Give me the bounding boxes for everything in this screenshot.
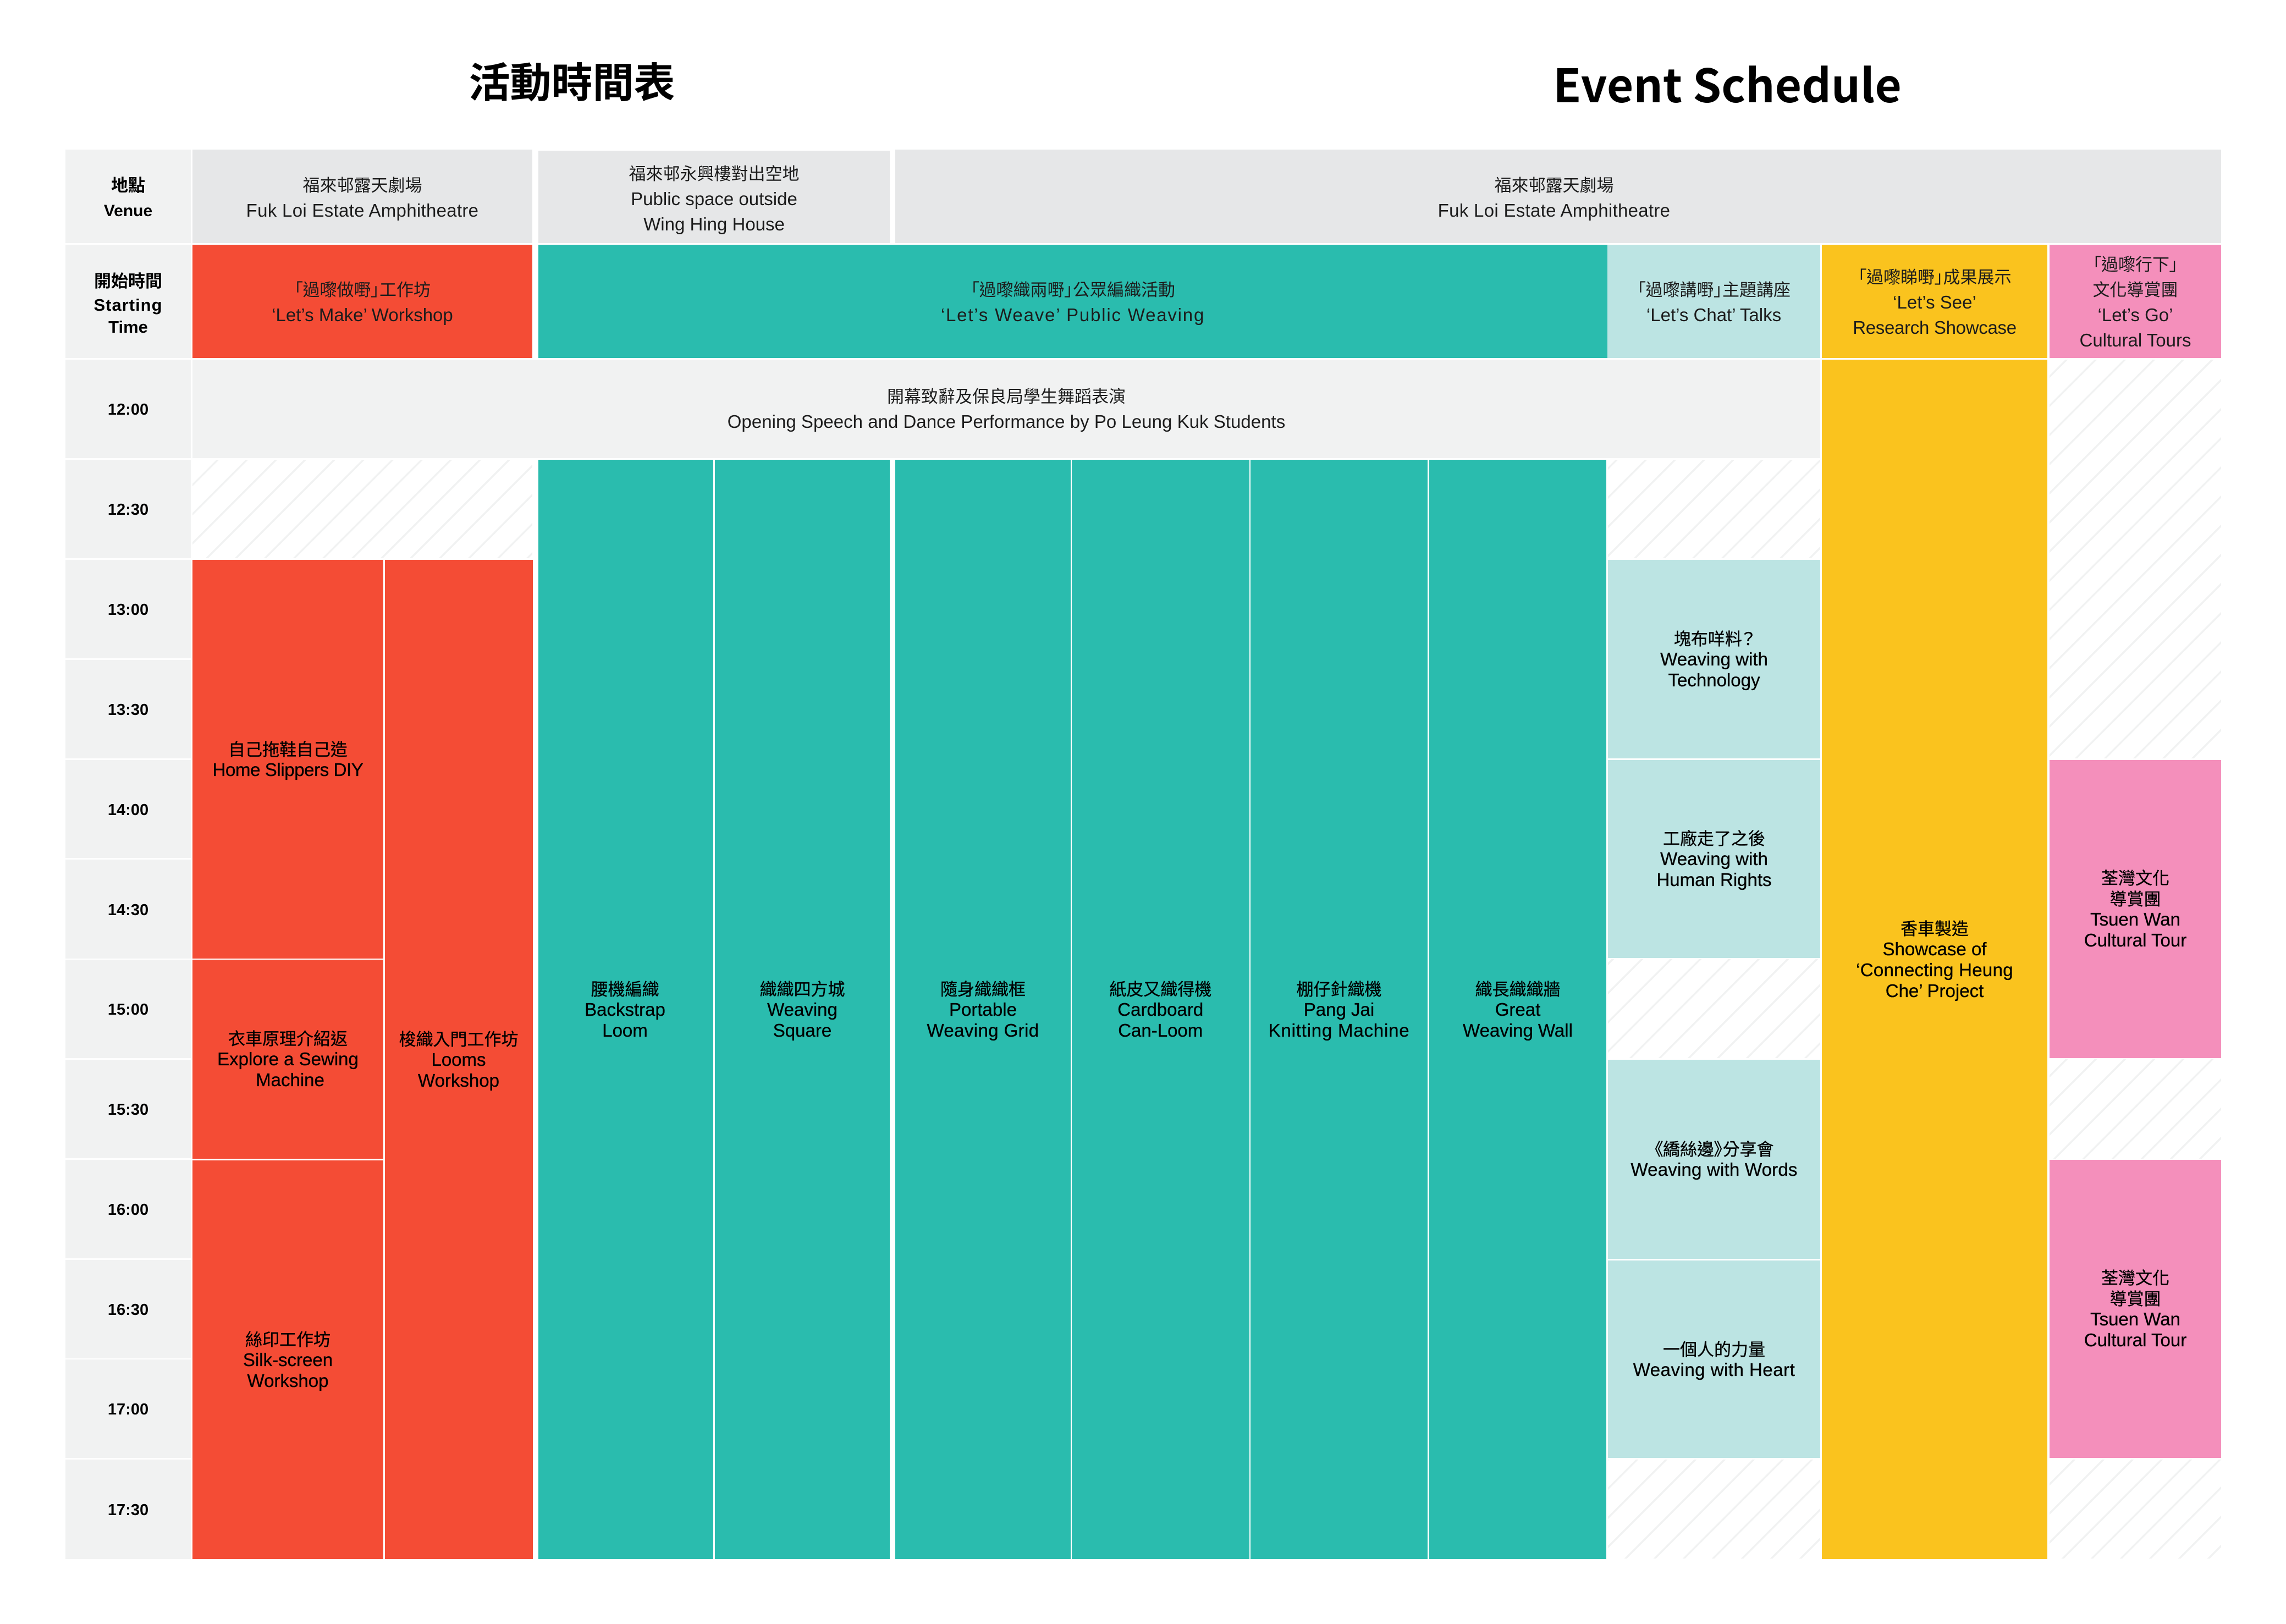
talk: Weaving with Words: Weaving with Words	[1631, 1159, 1798, 1180]
workshop: Home Slippers DIY	[192, 560, 383, 959]
category header: Let's See: 「過嚟睇嘢」成果展示	[1858, 268, 2012, 287]
time label 15:30	[65, 1060, 191, 1158]
venue: Wing Hing House	[538, 151, 890, 243]
hatched empty slot: tours 12:00 to 13:30	[2050, 360, 2221, 758]
category header: Let's Weave: ‘Let’s Weave’ Public Weaving	[941, 305, 1205, 325]
weaving: Cardboard Can-Loom: 紙皮又織得機	[1109, 980, 1211, 999]
time label 16:00: 16:00	[108, 1201, 148, 1219]
weaving: Portable Weaving Grid: 隨身織織框	[940, 980, 1026, 999]
category header: Let's Weave	[538, 245, 1607, 358]
time label 16:30: 16:30	[108, 1301, 148, 1319]
time label 12:00	[65, 360, 191, 458]
weaving: Backstrap Loom: Loom	[602, 1020, 648, 1041]
weaving: Great Weaving Wall: Weaving Wall	[1463, 1020, 1573, 1041]
time label 13:30	[65, 660, 191, 758]
weaving: Weaving Square: 織織四方城	[760, 980, 845, 999]
workshop: Explore a Sewing Machine: 衣車原理介紹返	[228, 1030, 348, 1049]
time label 14:00: 14:00	[108, 801, 148, 818]
tour: Tsuen Wan Cultural Tour, second session: Cultural Tour	[2084, 1330, 2186, 1350]
workshop: Silk-screen: 絲印工作坊	[245, 1330, 330, 1350]
venue: Fuk Loi Estate Amphitheatre, workshops: 福來邨露天劇場	[302, 176, 422, 195]
talk: Weaving with Technology: Weaving with	[1660, 649, 1768, 669]
category header: Let's See: ‘Let’s See’	[1893, 292, 1976, 312]
time label 15:00: 15:00	[108, 1001, 148, 1019]
tour: Tsuen Wan Cultural Tour, first session: 荃灣文化	[2101, 869, 2169, 888]
tour: Tsuen Wan Cultural Tour, first session	[2050, 760, 2221, 1058]
time label 15:00	[65, 960, 191, 1058]
showcase: Connecting Heung Che: ‘Connecting Heung	[1856, 959, 2013, 980]
weaving: Pang Jai Knitting Machine: Pang Jai	[1304, 999, 1374, 1020]
time label 16:30	[65, 1260, 191, 1358]
talk: Weaving with Heart: Weaving with Heart	[1633, 1359, 1795, 1379]
tour: Tsuen Wan Cultural Tour, second session: 導賞團	[2109, 1290, 2161, 1309]
time label 13:30: 13:30	[108, 701, 148, 719]
time label 14:30: 14:30	[108, 901, 148, 918]
row label: starting time: 開始時間	[94, 272, 162, 291]
category header: Let's Weave: 「過嚟織兩嘢」公眾編織活動	[971, 280, 1175, 300]
hatched empty slot: talks 17:30	[1608, 1460, 1820, 1559]
time label 17:00: 17:00	[108, 1401, 148, 1418]
tour: Tsuen Wan Cultural Tour, first session: Cultural Tour	[2084, 930, 2186, 950]
category header: Let's Make	[192, 245, 532, 358]
venue: Fuk Loi Estate Amphitheatre, workshops	[192, 150, 532, 243]
weaving: Portable Weaving Grid	[895, 460, 1071, 1559]
venue: Fuk Loi Estate Amphitheatre, remaining activities: Fuk Loi Estate Amphitheatre	[1438, 200, 1670, 220]
time label 17:00	[65, 1359, 191, 1458]
talk: Weaving with Human Rights	[1608, 760, 1820, 958]
category header: Let's Chat: ‘Let’s Chat’ Talks	[1646, 305, 1781, 325]
category header: Let's Go: 文化導賞團	[2093, 280, 2178, 300]
time label 14:00	[65, 760, 191, 858]
workshop: Home Slippers DIY: 自己拖鞋自己造	[228, 740, 348, 759]
time label 14:30	[65, 860, 191, 959]
tour: Tsuen Wan Cultural Tour, second session: Tsuen Wan	[2090, 1309, 2180, 1329]
talk: Weaving with Heart	[1608, 1260, 1820, 1458]
weaving: Weaving Square: Square	[773, 1020, 831, 1041]
time label 13:00: 13:00	[108, 601, 148, 619]
category header: Let's Chat	[1607, 245, 1820, 358]
weaving: Backstrap Loom	[538, 460, 713, 1559]
category header: Let's Make: 「過嚟做嘢」工作坊	[294, 280, 431, 300]
venue: Fuk Loi Estate Amphitheatre, remaining activities: 福來邨露天劇場	[1495, 176, 1613, 195]
row label: venue	[65, 150, 191, 243]
talk: Weaving with Heart: 一個人的力量	[1663, 1340, 1765, 1359]
opening ceremony band	[192, 360, 1820, 458]
talk: Weaving with Technology: Technology	[1668, 670, 1760, 690]
weaving: Weaving Square	[715, 460, 890, 1559]
venue: Wing Hing House: Wing Hing House	[643, 214, 785, 234]
workshop: Explore a Sewing Machine	[192, 960, 383, 1159]
showcase: Connecting Heung Che: Che’ Project	[1886, 980, 1984, 1001]
weaving: Great Weaving Wall	[1429, 460, 1606, 1559]
showcase: Connecting Heung Che: Showcase of	[1883, 938, 1986, 959]
row label: starting time	[65, 245, 191, 358]
talk: Weaving with Human Rights: 工廠走了之後	[1663, 829, 1765, 849]
weaving: Pang Jai Knitting Machine	[1251, 460, 1428, 1559]
venue: Wing Hing House: 福來邨永興樓對出空地	[629, 164, 800, 184]
time label 12:30	[65, 460, 191, 558]
category header: Let's Chat: 「過嚟講嘢」主題講座	[1637, 280, 1791, 300]
row label: venue: 地點	[111, 176, 145, 195]
talk: Weaving with Human Rights: Human Rights	[1656, 869, 1772, 890]
row label: venue: Venue	[104, 202, 152, 220]
workshop: Silk-screen: Silk-screen	[243, 1350, 333, 1369]
category header: Let's Go: ‘Let’s Go’	[2098, 305, 2173, 325]
talk: Weaving with Words: 《繑絲邊》分享會	[1654, 1140, 1774, 1159]
talk: Weaving with Technology	[1608, 560, 1820, 758]
showcase: Connecting Heung Che: 香車製造	[1901, 920, 1969, 938]
category header: Let's Go: 「過嚟行下」	[2093, 255, 2178, 274]
weaving: Backstrap Loom: Backstrap	[585, 999, 665, 1020]
hatched empty slot: tours 15:30	[2050, 1059, 2221, 1159]
weaving: Cardboard Can-Loom: Cardboard	[1117, 999, 1203, 1020]
tour: Tsuen Wan Cultural Tour, first session: 導賞團	[2109, 890, 2161, 909]
venue: Fuk Loi Estate Amphitheatre, remaining activities	[895, 150, 2221, 243]
category header: Let's Go	[2050, 245, 2221, 358]
talk: Weaving with Human Rights: Weaving with	[1660, 849, 1768, 869]
category header: Let's Go: Cultural Tours	[2080, 330, 2191, 350]
hatched empty slot: tours 17:30	[2050, 1460, 2221, 1559]
row label: starting time: Starting	[93, 295, 163, 315]
workshop: Explore a Sewing Machine: Machine	[256, 1070, 324, 1090]
weaving: Weaving Square: Weaving	[767, 999, 838, 1020]
weaving: Great Weaving Wall: Great	[1495, 999, 1540, 1020]
category header: Let's See: Research Showcase	[1853, 317, 2017, 338]
weaving: Portable Weaving Grid: Portable	[949, 999, 1017, 1020]
weaving: Cardboard Can-Loom: Can-Loom	[1118, 1020, 1203, 1041]
tour: Tsuen Wan Cultural Tour, first session: Tsuen Wan	[2090, 909, 2180, 929]
hatched empty slot: talks 15:00	[1608, 959, 1820, 1058]
talk: Weaving with Words	[1608, 1060, 1820, 1259]
workshop: Looms: Workshop	[418, 1070, 499, 1090]
category header: Let's Make: ‘Let’s Make’ Workshop	[272, 305, 453, 325]
time label 13:00	[65, 560, 191, 658]
time label 17:30	[65, 1460, 191, 1559]
workshop: Silk-screen: Workshop	[247, 1370, 328, 1390]
weaving: Great Weaving Wall: 織長織織牆	[1475, 980, 1561, 999]
tour: Tsuen Wan Cultural Tour, second session	[2050, 1160, 2221, 1458]
weaving: Pang Jai Knitting Machine: 棚仔針織機	[1297, 980, 1381, 999]
title: Chinese: 活動時間表	[469, 49, 675, 109]
talk: Weaving with Technology: 塊布咩料？	[1674, 629, 1754, 649]
workshop: Home Slippers DIY: Home Slippers DIY	[213, 759, 363, 780]
showcase: Connecting Heung Che	[1822, 360, 2047, 1559]
weaving: Portable Weaving Grid: Weaving Grid	[927, 1020, 1039, 1041]
venue: Wing Hing House: Public space outside	[631, 189, 797, 209]
weaving: Pang Jai Knitting Machine: Knitting Machine	[1269, 1020, 1409, 1041]
venue: Fuk Loi Estate Amphitheatre, workshops: Fuk Loi Estate Amphitheatre	[246, 200, 478, 220]
time label 16:00	[65, 1160, 191, 1258]
category header: Let's See	[1822, 245, 2047, 358]
workshop: Looms: Looms	[431, 1049, 486, 1069]
weaving: Backstrap Loom: 腰機編織	[591, 980, 659, 999]
row label: starting time: Time	[108, 317, 148, 337]
weaving: Cardboard Can-Loom	[1072, 460, 1249, 1559]
workshop: Silk-screen	[192, 1160, 383, 1559]
time label 12:30: 12:30	[108, 501, 148, 519]
hatched empty slot: talks 12:30	[1608, 460, 1820, 558]
workshop: Looms	[385, 560, 532, 1559]
workshop: Explore a Sewing Machine: Explore a Sewing	[217, 1049, 359, 1069]
workshop: Looms: 梭織入門工作坊	[399, 1030, 518, 1049]
title: English: Event Schedule	[1553, 49, 1902, 116]
hatched empty slot: workshop 12:30	[192, 460, 532, 558]
time label 17:30: 17:30	[108, 1501, 148, 1519]
tour: Tsuen Wan Cultural Tour, second session: 荃灣文化	[2101, 1269, 2169, 1288]
opening ceremony band: Opening Speech and Dance Performance by Po Leung Kuk Students	[728, 411, 1285, 432]
time label 12:00: 12:00	[108, 401, 148, 419]
opening ceremony band: 開幕致辭及保良局學生舞蹈表演	[887, 387, 1126, 406]
time label 15:30: 15:30	[108, 1101, 148, 1119]
